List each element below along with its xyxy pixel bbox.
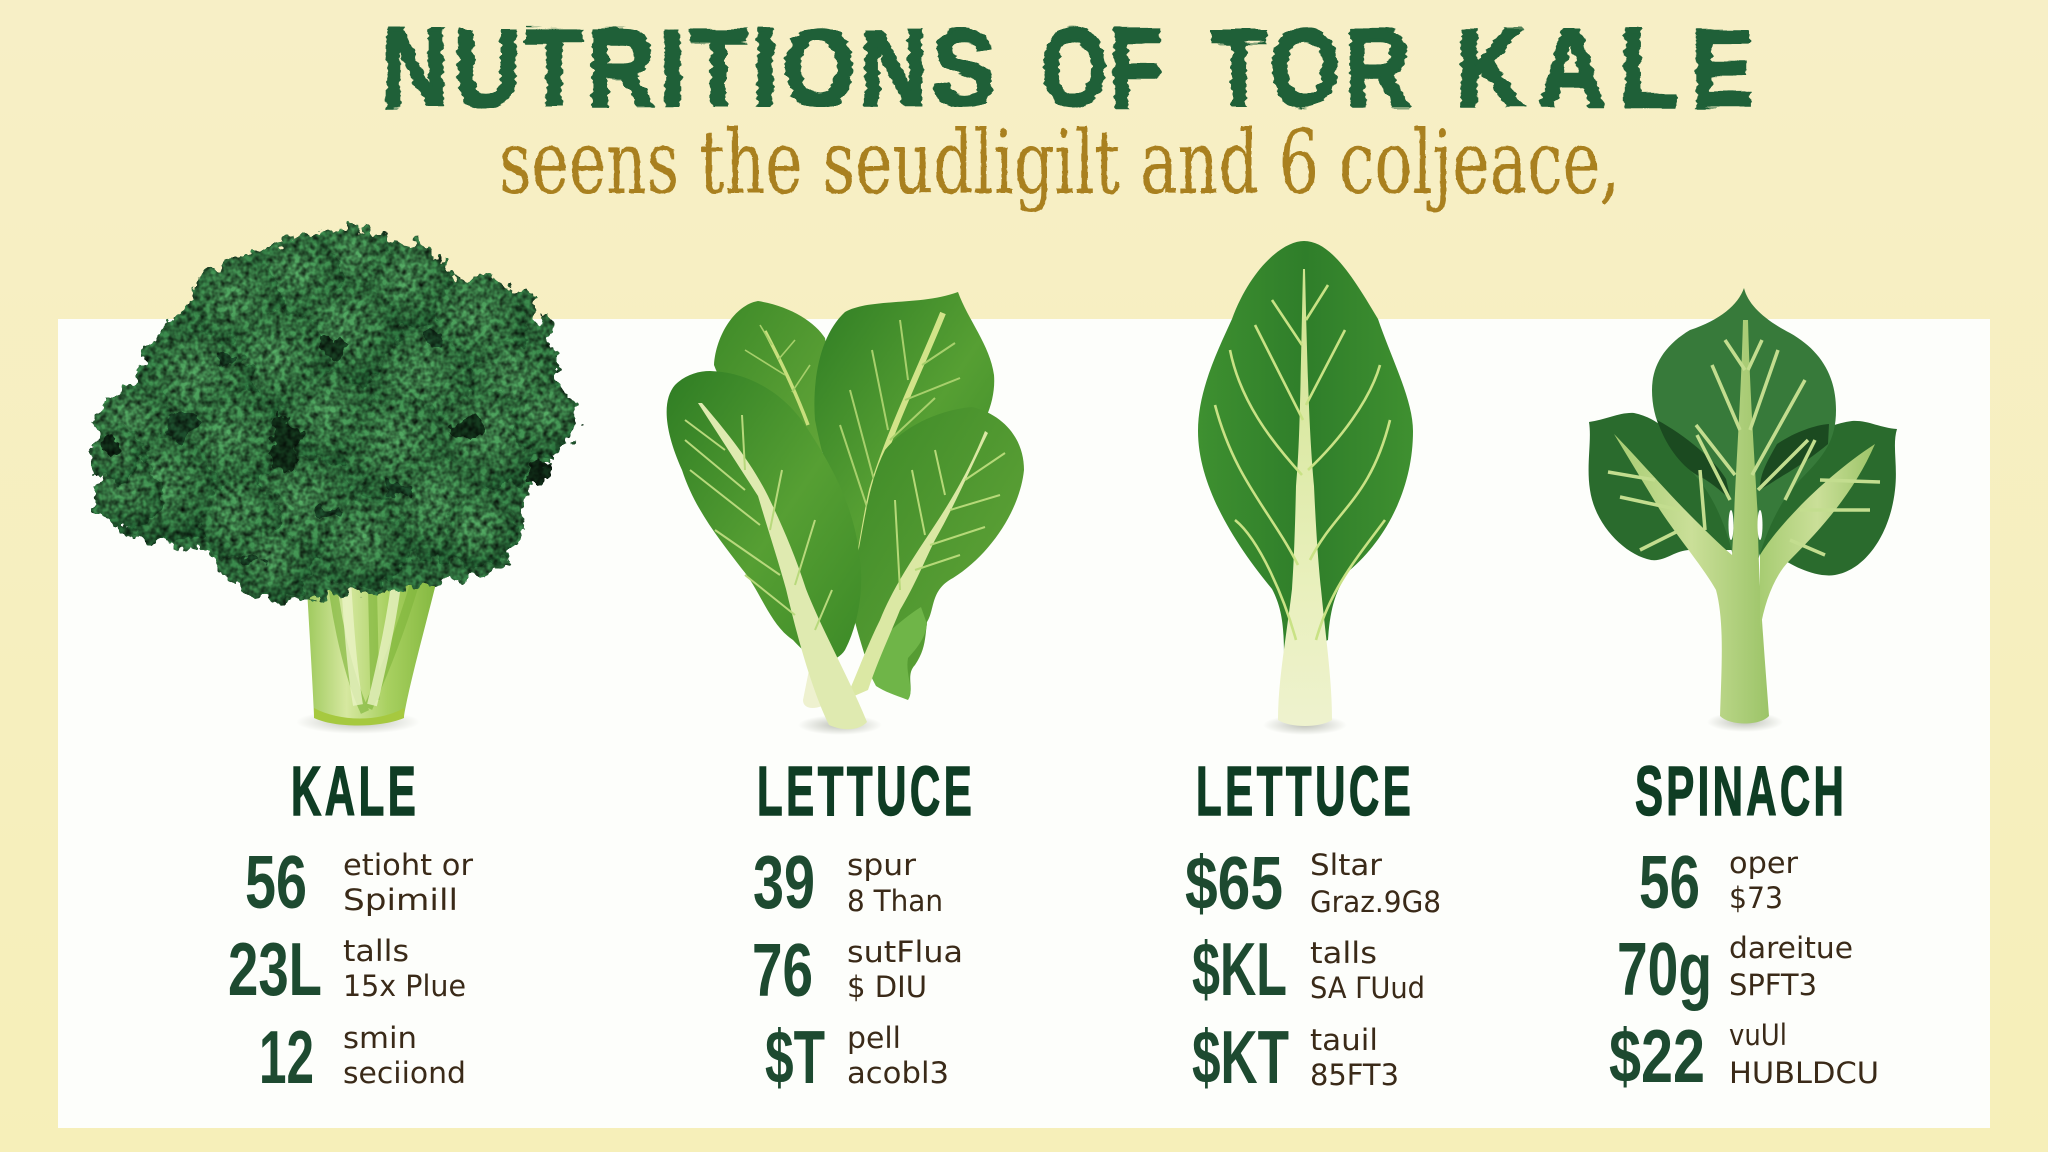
stat 3: tauil — [1310, 1023, 1378, 1057]
stat 3: $T — [765, 1015, 825, 1099]
title — [381, 7, 1754, 130]
stat 1: etioht or — [343, 848, 473, 882]
stat 3 — [1192, 1015, 1399, 1099]
stat 3: smin — [343, 1021, 417, 1055]
stat 2: talls — [1310, 936, 1377, 970]
title: NUTRITIONS — [381, 7, 995, 130]
stat 1: 8 Than — [847, 884, 943, 918]
left spinach leaf — [1589, 413, 1733, 560]
stat 3: 85FT3 — [1310, 1058, 1399, 1092]
front left leaf — [667, 371, 867, 729]
stat 2: 15x Plue — [343, 969, 466, 1003]
column: lettuce 2 — [1185, 753, 1441, 1099]
stat 3 — [259, 1015, 466, 1099]
back centre leaf — [814, 292, 994, 600]
stat 2: 23L — [228, 927, 322, 1011]
illustration: kale — [92, 225, 580, 734]
stat 1: oper — [1729, 846, 1798, 880]
stat 1: 56 — [1639, 840, 1700, 924]
stat 3: $22 — [1609, 1014, 1705, 1098]
stat 3: 12 — [259, 1015, 314, 1099]
top spinach leaf — [1652, 288, 1836, 560]
stat 1 — [753, 840, 943, 924]
stat 1 — [1185, 841, 1441, 925]
heading: KALE — [291, 753, 416, 831]
subtitle: seens the seudligilt and 6 coljeace, — [499, 111, 1620, 214]
white panel — [58, 319, 1990, 1128]
back left leaf — [714, 301, 829, 480]
stat 1 — [1639, 840, 1798, 924]
stat 2: $KL — [1192, 927, 1287, 1011]
stat 1: $73 — [1729, 881, 1783, 915]
stat 2: dareitue — [1729, 931, 1853, 965]
right leaf — [845, 407, 1024, 700]
column: lettuce 1 — [752, 753, 972, 1099]
stat 2 — [228, 927, 466, 1011]
stat 3: acobl3 — [847, 1056, 949, 1090]
veins — [1215, 285, 1390, 640]
stat 2: SPFT3 — [1729, 968, 1817, 1002]
heading: LETTUCE — [757, 753, 972, 831]
small back stem — [803, 640, 835, 708]
title: KALE — [1456, 7, 1754, 130]
stat 1: 39 — [753, 840, 815, 924]
heading: LETTUCE — [1196, 753, 1411, 831]
title: OF — [1041, 7, 1162, 129]
right spinach leaf — [1758, 421, 1897, 575]
stat 2: talls — [343, 934, 409, 968]
column: kale — [228, 753, 473, 1099]
stat 3: $KT — [1192, 1015, 1289, 1099]
stat 1: $65 — [1185, 841, 1283, 925]
stat 3 — [765, 1015, 949, 1099]
midrib and stalk — [1278, 269, 1332, 726]
stat 2: 70g — [1617, 927, 1712, 1011]
illustration: lettuce bunch — [667, 292, 1024, 735]
stat 3 — [1609, 1014, 1879, 1098]
heading: SPINACH — [1635, 753, 1844, 831]
column: spinach — [1609, 753, 1879, 1098]
stat 1 — [245, 840, 473, 924]
stat 2: $ DIU — [847, 970, 927, 1004]
stat 3: vuUl — [1729, 1018, 1787, 1052]
illustration: single lettuce leaf — [1198, 241, 1413, 735]
stat 1: spur — [847, 848, 916, 882]
stat 2 — [1192, 927, 1425, 1011]
stat 2: sutFlua — [847, 935, 963, 969]
stat 2 — [1617, 927, 1853, 1011]
stat 3: seciiond — [343, 1056, 466, 1090]
stems and veins — [1608, 320, 1880, 724]
leaf blade — [1198, 241, 1413, 660]
kale crown — [92, 225, 580, 603]
kale stem — [305, 550, 443, 726]
stat 2 — [752, 928, 963, 1012]
stat 1: Graz.9G8 — [1310, 885, 1441, 919]
illustration: spinach — [1589, 288, 1897, 732]
stat 3: HUBLDCU — [1729, 1056, 1879, 1090]
stat 3: pell — [847, 1021, 901, 1055]
stat 2: SA ΓUud — [1310, 971, 1425, 1005]
stat 1: Sltar — [1310, 848, 1382, 882]
stat 2: 76 — [752, 928, 813, 1012]
dark overlaps — [1657, 420, 1829, 500]
stat 1: Spimill — [343, 883, 458, 917]
title: TOR — [1211, 8, 1410, 130]
stat 1: 56 — [245, 840, 307, 924]
